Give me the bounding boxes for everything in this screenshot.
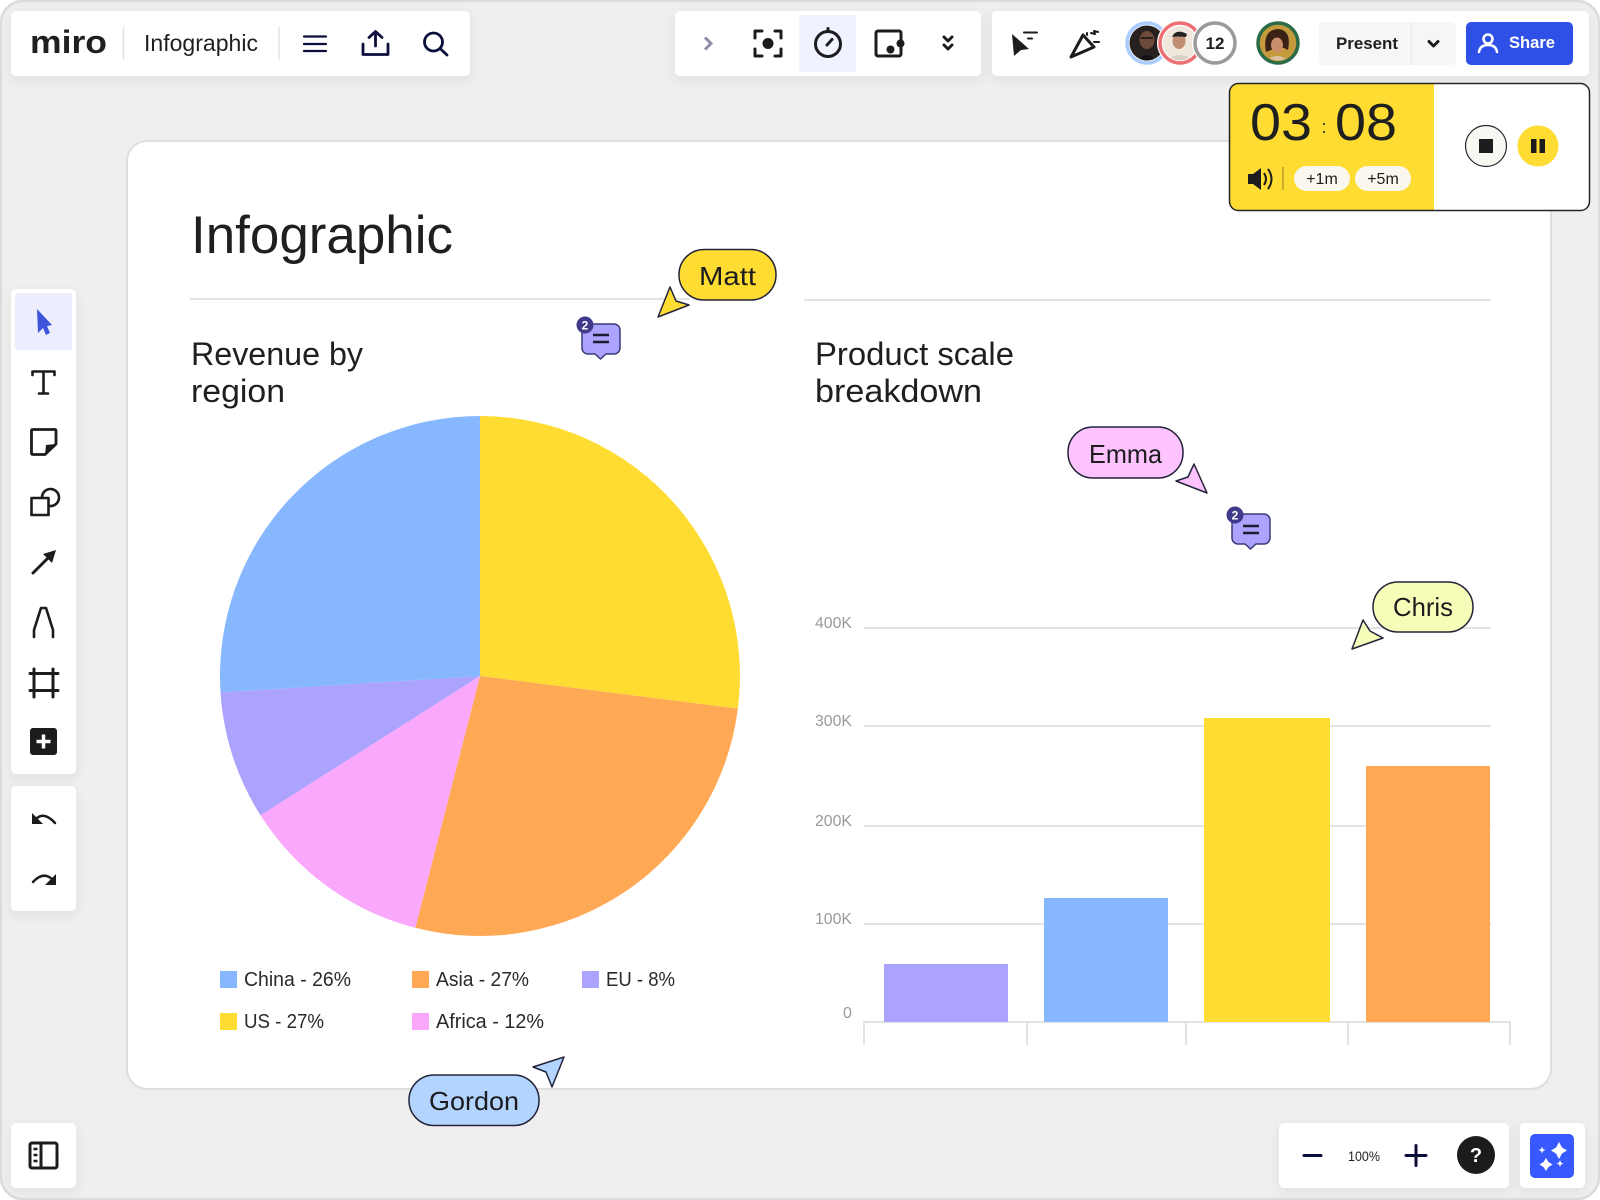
panel: undo redo <box>11 786 76 911</box>
icon: focus frame <box>755 31 781 56</box>
avatar 3: count <box>1192 20 1238 66</box>
button: present: Present <box>1336 34 1398 53</box>
icon: menu <box>304 36 326 51</box>
button: +5m: +5m <box>1367 171 1399 188</box>
heading: revenue by region: Revenue by <box>191 336 363 372</box>
icon: double chevron <box>944 37 952 49</box>
icon: frame <box>30 669 58 697</box>
heading: revenue by region <box>191 336 363 409</box>
panel: center toolbar <box>675 11 981 76</box>
icon: cursor followers <box>1012 32 1037 56</box>
button: +1m <box>1294 166 1350 191</box>
panel: left tools <box>11 289 76 774</box>
button: present <box>1319 22 1456 65</box>
bar chart: product scale <box>815 615 1510 1045</box>
panel: top-left toolbar <box>11 11 470 76</box>
comment icon 1 <box>576 316 620 359</box>
avatar 2 <box>1157 21 1197 65</box>
pie chart: revenue by region <box>220 416 740 936</box>
icon: sidebar <box>30 1143 57 1168</box>
slice: China 26% <box>220 416 480 692</box>
y axis labels: 200K <box>815 813 852 830</box>
timer digits: 03 <box>1250 94 1312 152</box>
bar: yellow <box>1204 718 1330 1022</box>
icon: text <box>32 372 54 394</box>
icon: speaker <box>1248 168 1272 190</box>
y axis labels: 400K <box>815 615 852 632</box>
legend item: Asia: Asia - 27% <box>436 969 529 991</box>
legend item: Africa: Africa - 12% <box>436 1011 544 1033</box>
button: +1m: +1m <box>1306 171 1338 188</box>
comment icon 2 <box>1226 506 1270 549</box>
slice: EU 8% <box>220 676 480 815</box>
zoom level: 100% <box>1348 1148 1380 1164</box>
y axis labels: 100K <box>815 911 852 928</box>
legend item: US: US - 27% <box>244 1011 324 1033</box>
y axis labels: 0 <box>843 1005 852 1022</box>
icon: add <box>30 728 57 755</box>
icon: arrow <box>33 550 56 573</box>
icon: select <box>37 309 52 335</box>
cursor: Emma <box>1068 427 1207 493</box>
icon: board card <box>876 31 904 56</box>
legend <box>220 969 675 1033</box>
heading: revenue by region: region <box>191 373 285 409</box>
cursor: Gordon <box>409 1057 564 1126</box>
icon: plus <box>1406 1146 1426 1166</box>
icon: party popper <box>1071 31 1099 57</box>
timer digits: : <box>1322 117 1327 137</box>
icon: help: ? <box>1470 1145 1482 1167</box>
panel: timer <box>1230 84 1590 210</box>
panel: sidebar toggle <box>11 1123 76 1188</box>
avatar 4 <box>1258 23 1298 63</box>
comment icon 2: 2 <box>1232 508 1239 522</box>
y axis labels <box>815 615 852 1022</box>
button: share <box>1466 22 1573 65</box>
icon: help <box>1457 1136 1495 1174</box>
button: stop <box>1466 126 1506 166</box>
bar: orange <box>1366 766 1490 1022</box>
y axis labels: 300K <box>815 713 852 730</box>
icon: timer highlighted <box>799 15 856 72</box>
logo: miro: miro <box>30 24 107 60</box>
cursor: Chris <box>1352 582 1473 649</box>
avatar 1 <box>1127 23 1167 63</box>
icon: upload <box>363 32 388 54</box>
title: Infographic <box>191 206 453 265</box>
panel: AI assistant <box>1520 1123 1585 1188</box>
timer digits: 08 <box>1335 94 1397 152</box>
icon: pen <box>34 608 53 637</box>
panel: zoom controls <box>1279 1123 1509 1188</box>
heading: product scale breakdown <box>815 336 1014 409</box>
legend item: China: China - 26% <box>244 969 351 991</box>
cursor: Chris: Chris <box>1393 592 1453 622</box>
icon: sticky note <box>32 430 56 455</box>
slice: Africa 12% <box>260 676 480 928</box>
panel: board canvas <box>127 141 1551 1089</box>
icon: redo <box>33 874 56 885</box>
avatar 3: count: 12 <box>1206 34 1224 53</box>
cursor: Emma: Emma <box>1089 439 1163 469</box>
icon: undo <box>32 813 55 824</box>
icon: sparkles <box>1538 1142 1567 1171</box>
button: share: Share <box>1509 34 1555 52</box>
legend item: EU: EU - 8% <box>606 969 675 991</box>
bar: purple <box>884 964 1008 1022</box>
slice: Asia 27% <box>415 676 738 936</box>
timer digits <box>1250 94 1397 152</box>
icon: shapes <box>32 489 59 515</box>
icon: chevron right <box>705 38 711 50</box>
slice: US 27% <box>480 416 740 709</box>
panel: top-right toolbar <box>992 11 1589 76</box>
cursor: Matt <box>658 250 776 317</box>
bar: blue <box>1044 898 1168 1022</box>
heading: product scale breakdown: breakdown <box>815 373 982 409</box>
button: pause <box>1518 126 1558 166</box>
cursor: Gordon: Gordon <box>429 1086 519 1116</box>
icon: minus <box>1304 1154 1321 1157</box>
board name: Infographic <box>144 30 258 56</box>
button: +5m <box>1355 166 1411 191</box>
heading: product scale breakdown: Product scale <box>815 336 1014 372</box>
comment icon 1: 2 <box>582 318 589 332</box>
cursor: Matt: Matt <box>699 261 757 291</box>
icon: search <box>424 33 447 55</box>
